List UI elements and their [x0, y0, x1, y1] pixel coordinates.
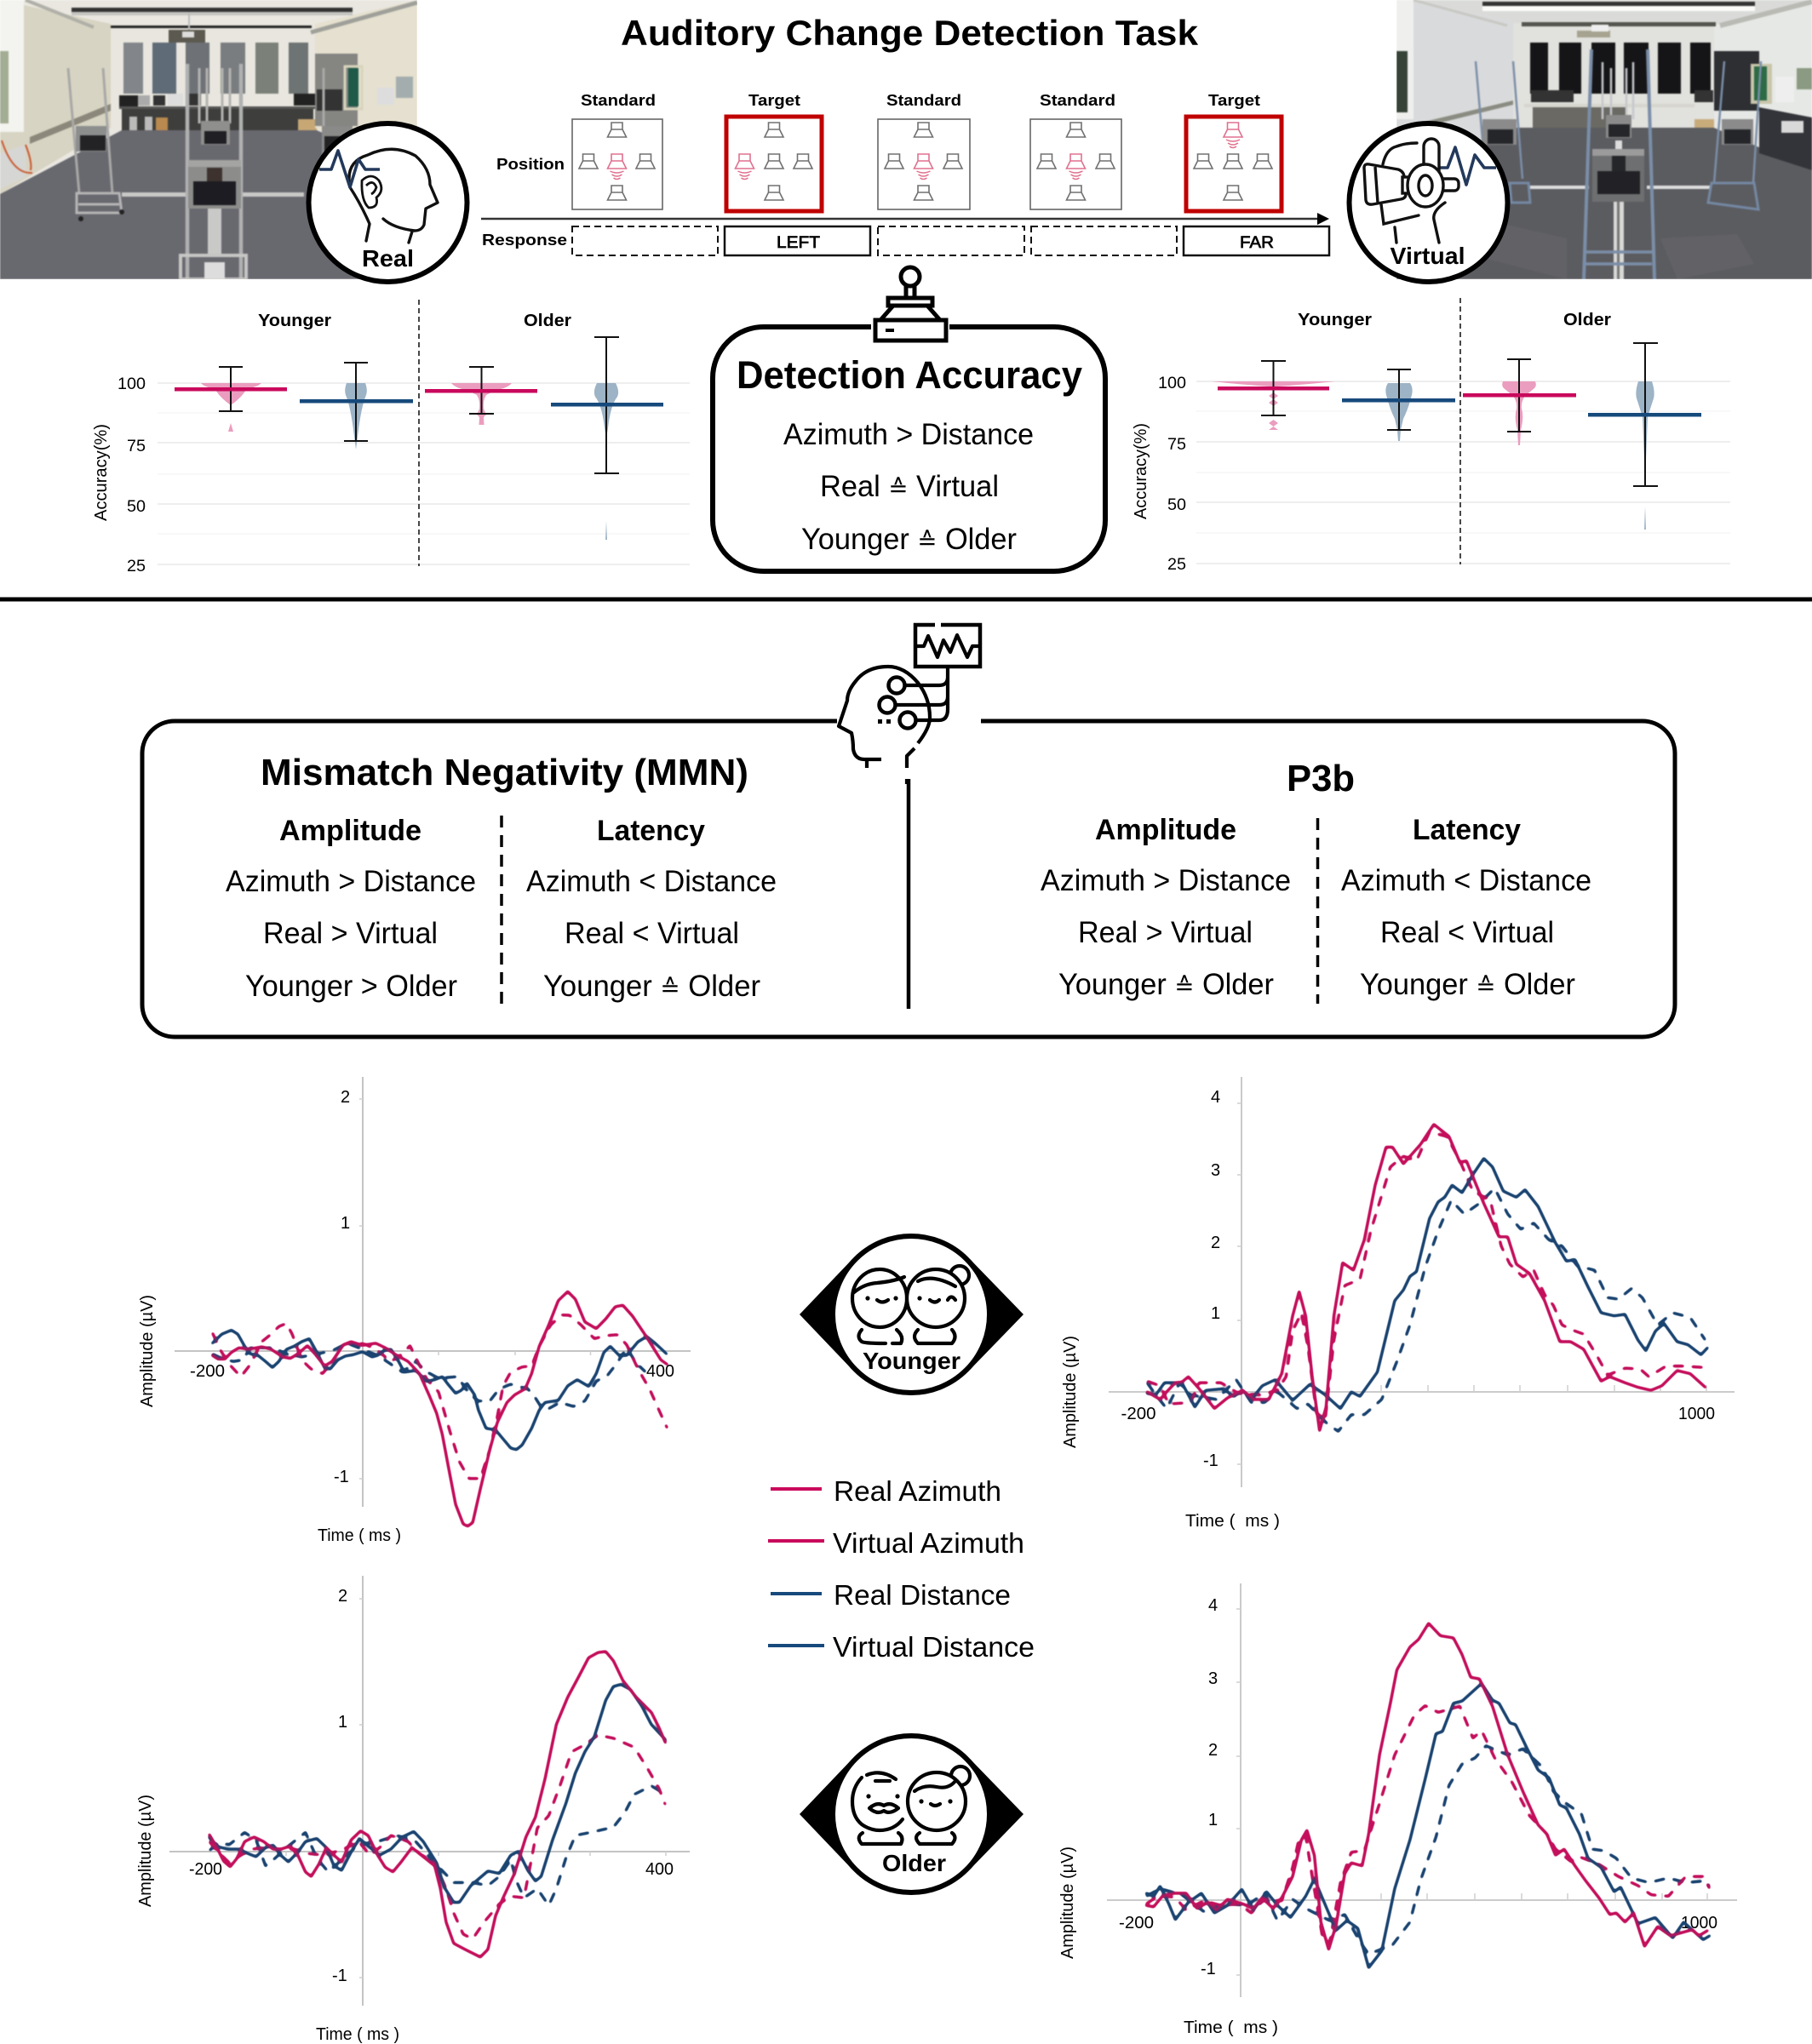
chart: real accuracy violins: 75 [127, 438, 146, 455]
chart: virtual accuracy violins: 50 [1167, 496, 1186, 514]
legend [768, 1475, 1035, 1663]
icon: virtual head badge: Virtual [1390, 243, 1465, 269]
photo: virtual laboratory room [1396, 0, 1812, 279]
label: response: Response [482, 232, 567, 249]
text: MMN latency: Real < Virtual [565, 917, 739, 950]
icon: real head badge: Real [362, 245, 414, 272]
text: detection results [783, 418, 1034, 556]
label: position: Position [496, 156, 565, 173]
chart: P3b older: 1 [1208, 1811, 1218, 1829]
text: P3b amplitude [1041, 814, 1291, 1001]
chart: MMN older: -1 [332, 1967, 347, 1985]
chart: P3b younger: -1 [1203, 1451, 1219, 1470]
trial 4: standard: Standard [1040, 92, 1115, 109]
chart: P3b younger: 1000 [1678, 1405, 1715, 1423]
icon: virtual head badge [1349, 123, 1507, 282]
chart: MMN older: 400 [645, 1860, 674, 1879]
chart: virtual accuracy violins: 25 [1167, 556, 1186, 574]
legend: Virtual Azimuth [833, 1527, 1024, 1559]
trial 4: standard [1030, 92, 1121, 209]
heading: MMN: Mismatch Negativity (MMN) [261, 752, 748, 793]
chart: P3b older: 2 [1208, 1741, 1218, 1760]
chart: MMN younger: 400 [646, 1362, 674, 1381]
text: MMN amplitude: Younger > Older [245, 970, 457, 1003]
chart: P3b younger: 3 [1211, 1161, 1220, 1180]
chart: MMN older: 1 [338, 1713, 347, 1732]
text: P3b latency: Real < Virtual [1380, 916, 1554, 949]
chart: real accuracy violins: 50 [127, 498, 146, 516]
text: detection results: Younger ≙ Older [801, 523, 1017, 556]
text: MMN amplitude [226, 815, 476, 1003]
text: P3b latency [1341, 814, 1591, 1001]
title: Auditory Change Detection Task [621, 13, 1199, 53]
chart: virtual accuracy violins: Older [1563, 311, 1611, 329]
chart: MMN younger [138, 1077, 691, 1545]
chart: virtual accuracy violins: 100 [1158, 375, 1186, 392]
chart: virtual accuracy violins: 75 [1167, 436, 1186, 454]
chart: real accuracy violins: 100 [118, 375, 146, 393]
response boxes: FAR [1240, 234, 1274, 252]
text: detection results: Real ≙ Virtual [820, 470, 999, 503]
legend: Real Azimuth [834, 1475, 1001, 1507]
photo: real laboratory room [0, 0, 417, 279]
chart: real accuracy violins: 25 [127, 558, 146, 575]
chart: P3b older: 1000 [1681, 1914, 1717, 1932]
panel: EEG results [142, 621, 1675, 1037]
chart: MMN younger: 1 [341, 1214, 350, 1233]
icon: younger group [800, 1236, 1024, 1393]
trial 1: standard: Standard [581, 92, 656, 109]
chart: real accuracy violins: Accuracy(%) [92, 424, 111, 521]
chart: P3b younger: -200 [1121, 1405, 1156, 1423]
chart: P3b younger [1061, 1077, 1735, 1531]
icon: joystick [875, 267, 946, 341]
chart: P3b younger: Time ( ms ) [1185, 1512, 1280, 1531]
chart: MMN younger: -1 [334, 1468, 349, 1486]
chart: MMN older: -200 [189, 1860, 222, 1879]
chart: MMN older: Amplitude (µV) [136, 1795, 155, 1907]
heading: detection accuracy: Detection Accuracy [737, 353, 1082, 397]
chart: P3b older: -200 [1119, 1914, 1154, 1932]
chart: real accuracy violins: Older [524, 312, 571, 330]
chart: P3b younger: 1 [1211, 1304, 1220, 1323]
chart: MMN older: Time ( ms ) [316, 2025, 399, 2044]
chart: P3b older: Time ( ms ) [1184, 2018, 1278, 2037]
chart: MMN younger: -200 [190, 1362, 225, 1381]
heading: P3b: P3b [1287, 758, 1355, 799]
chart: MMN older [136, 1576, 690, 2044]
chart: P3b younger: 2 [1211, 1234, 1220, 1252]
chart: P3b older [1058, 1583, 1737, 2037]
text: MMN latency: Latency [597, 815, 705, 847]
text: P3b amplitude: Real > Virtual [1078, 916, 1253, 949]
chart: P3b older: 4 [1208, 1596, 1218, 1615]
chart: MMN older: 2 [338, 1587, 347, 1606]
arrow: timeline [481, 213, 1329, 225]
trial 2: target left: Target [748, 92, 800, 109]
icon: older group [800, 1736, 1024, 1892]
text: detection results: Azimuth > Distance [783, 418, 1034, 451]
chart: MMN younger: Amplitude (µV) [138, 1295, 157, 1407]
text: P3b latency: Azimuth < Distance [1341, 864, 1591, 897]
chart: MMN younger: 2 [341, 1088, 350, 1107]
legend: Virtual Distance [833, 1631, 1035, 1663]
trial 2: target left [726, 92, 822, 211]
chart: P3b older: -1 [1201, 1960, 1216, 1978]
chart: virtual accuracy violins [1132, 298, 1730, 574]
text: P3b amplitude: Younger ≙ Older [1058, 968, 1274, 1001]
chart: P3b younger: Amplitude (µV) [1061, 1336, 1080, 1448]
trial 1: standard [572, 92, 662, 209]
chart: MMN younger: Time ( ms ) [318, 1526, 401, 1545]
trial 5: target far [1186, 92, 1282, 211]
divider line [0, 598, 1812, 601]
chart: virtual accuracy violins: Accuracy(%) [1132, 423, 1150, 519]
trial 5: target far: Target [1208, 92, 1260, 109]
text: MMN latency [526, 815, 777, 1003]
text: MMN latency: Azimuth < Distance [526, 865, 777, 898]
panel: detection accuracy [713, 267, 1105, 571]
text: P3b amplitude: Azimuth > Distance [1041, 864, 1291, 897]
trial 3: standard: Standard [886, 92, 961, 109]
text: MMN amplitude: Azimuth > Distance [226, 865, 476, 898]
text: MMN latency: Younger ≙ Older [543, 970, 760, 1003]
text: MMN amplitude: Real > Virtual [263, 917, 438, 950]
icon: younger group: Younger [863, 1348, 960, 1374]
response boxes [572, 226, 1329, 255]
trial 3: standard [878, 92, 970, 209]
icon: brain signal head [839, 621, 980, 784]
icon: older group: Older [882, 1850, 946, 1876]
text: P3b amplitude: Amplitude [1095, 814, 1236, 846]
legend: Real Distance [834, 1579, 1011, 1611]
chart: real accuracy violins [92, 300, 690, 575]
text: P3b latency: Latency [1413, 814, 1521, 846]
chart: P3b older: 3 [1208, 1669, 1218, 1688]
chart: real accuracy violins: Younger [258, 312, 331, 330]
chart: P3b younger: 4 [1211, 1088, 1220, 1107]
icon: real head badge [308, 123, 467, 282]
text: MMN amplitude: Amplitude [279, 815, 421, 847]
panel: stimulus sequence [481, 92, 1329, 255]
chart: virtual accuracy violins: Younger [1298, 311, 1372, 329]
chart: P3b older: Amplitude (µV) [1058, 1846, 1077, 1959]
text: P3b latency: Younger ≙ Older [1360, 968, 1575, 1001]
response boxes: LEFT [777, 234, 820, 252]
